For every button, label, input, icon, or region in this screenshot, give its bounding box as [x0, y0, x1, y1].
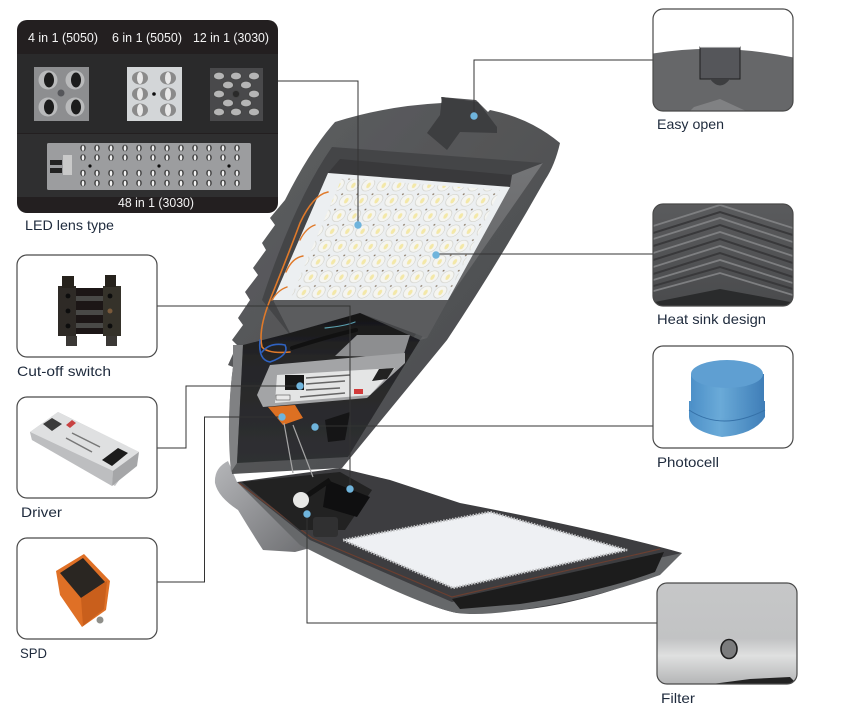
right sloped wall	[420, 163, 543, 340]
leader: photocell	[315, 425, 653, 427]
leader: driver	[157, 386, 300, 448]
label: easy open: Easy open	[657, 116, 724, 132]
lower compartment	[237, 313, 420, 463]
easy open frame	[653, 9, 793, 111]
panel: SPD	[17, 538, 157, 639]
marker dots	[278, 112, 478, 518]
driver bracket	[335, 335, 410, 357]
cut-off switch in lamp	[325, 412, 350, 442]
panel: photocell	[653, 346, 793, 448]
lamp mounting body	[215, 461, 310, 552]
top recess wall	[328, 159, 512, 187]
upper housing	[228, 97, 560, 474]
label: filter: Filter	[661, 690, 695, 706]
lens: 12 in 1	[210, 68, 263, 121]
heading: 6 in 1: 6 in 1 (5050)	[112, 31, 182, 45]
leader: SPD	[157, 417, 282, 582]
lens: 48 in 1	[47, 143, 251, 190]
image: latch closeup	[650, 47, 796, 112]
panel: easy open	[650, 9, 796, 112]
panel: driver	[17, 397, 157, 498]
lens panel background	[17, 20, 278, 213]
leader: cut-off switch	[157, 306, 350, 489]
panel: cut-off switch	[17, 255, 157, 357]
LED board	[273, 173, 510, 300]
leader: heat sink	[436, 253, 653, 255]
label: heat sink design: Heat sink design	[657, 311, 766, 327]
leader: filter	[307, 514, 657, 623]
panel: LED lens types	[17, 20, 278, 213]
lower diffuser window	[343, 512, 627, 588]
photo: opened street lamp	[215, 97, 682, 614]
icon: switch block	[58, 275, 121, 346]
panel: filter	[657, 583, 797, 684]
lens: 4 in 1	[34, 67, 89, 121]
icon: photocell cap	[689, 360, 765, 437]
label: photocell: Photocell	[657, 454, 719, 470]
inner recess	[262, 147, 543, 338]
SPD unit	[268, 405, 303, 425]
cable gland	[293, 480, 370, 537]
latch	[427, 97, 497, 150]
leader: easy open	[474, 60, 653, 116]
left back strip	[229, 345, 243, 472]
image: filter closeup	[657, 583, 797, 684]
heat sink frame	[653, 204, 793, 306]
driver unit	[257, 353, 405, 407]
leader: LED lens type	[278, 81, 358, 225]
icon: SPD unit	[56, 554, 110, 627]
support arms	[284, 423, 313, 477]
panel: heat sink design	[650, 204, 796, 307]
label: SPD: SPD	[20, 645, 47, 661]
bottom recess wall	[273, 300, 448, 338]
lens: 6 in 1	[127, 67, 182, 121]
heading: 48 in 1: 48 in 1 (3030)	[118, 196, 194, 210]
wire harness	[260, 192, 356, 362]
image: heat sink fins	[650, 204, 796, 307]
label: cut-off switch: Cut-off switch	[17, 363, 111, 379]
filter frame	[657, 583, 797, 684]
heading: 12 in 1: 12 in 1 (3030)	[193, 31, 269, 45]
icon: driver unit	[30, 412, 139, 486]
heading: 4 in 1: 4 in 1 (5050)	[28, 31, 98, 45]
label: driver: Driver	[21, 504, 62, 520]
lower tray	[237, 468, 682, 614]
label: LED lens type: LED lens type	[25, 217, 114, 233]
LED array	[290, 178, 500, 300]
